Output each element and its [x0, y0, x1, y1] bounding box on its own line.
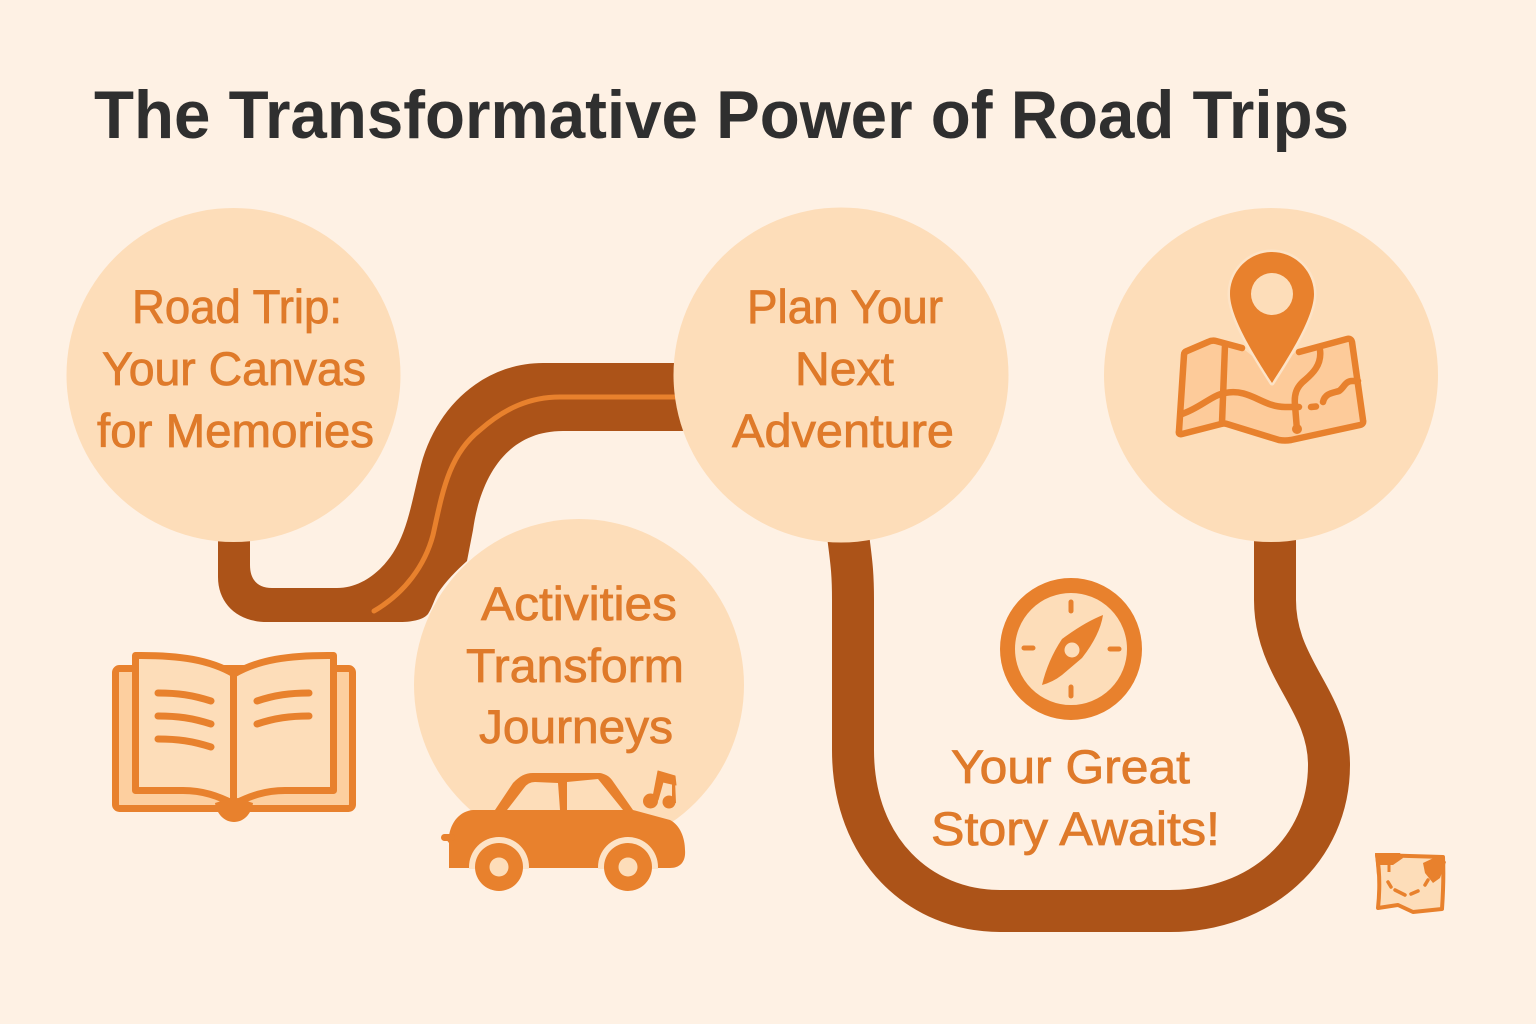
circle text: Adventure: Adventure [732, 404, 954, 457]
panel: Activities Transform Journeys circle [414, 519, 744, 851]
icon: car [441, 773, 685, 904]
circle text: Transform: Transform [466, 639, 684, 692]
panel: Road Trip canvas circle [66, 208, 400, 542]
circle text: Your Canvas: Your Canvas [102, 342, 366, 395]
panel: map and pin circle [1104, 208, 1438, 542]
title: The Transformative Power of Road Trips [94, 77, 1349, 153]
circle text: for Memories: for Memories [97, 404, 374, 457]
circle text: Plan Your: Plan Your [747, 280, 943, 333]
road centre line [374, 397, 680, 611]
icon: folded map [1179, 339, 1364, 441]
circle text: Activities: Activities [481, 577, 677, 630]
circle text: Road Trip: Road Trip: [132, 280, 342, 333]
icon: small treasure map [1375, 853, 1446, 912]
icon: music note [643, 771, 676, 808]
road: second winding segment [848, 535, 1329, 911]
callout text: Your Great Story Awaits [931, 740, 1220, 855]
panel: Plan Your Next Adventure circle [674, 208, 1008, 542]
callout text: Your Great Story Awaits: Your Great [951, 740, 1190, 793]
circle text: Journeys: Journeys [479, 700, 673, 753]
road: first winding segment [218, 363, 690, 622]
icon: open book [116, 655, 352, 822]
circle text: Next: Next [795, 342, 894, 395]
callout text: Your Great Story Awaits: Story Awaits! [931, 802, 1220, 855]
icon: location pin [1230, 252, 1314, 383]
icon: compass [1008, 586, 1134, 712]
